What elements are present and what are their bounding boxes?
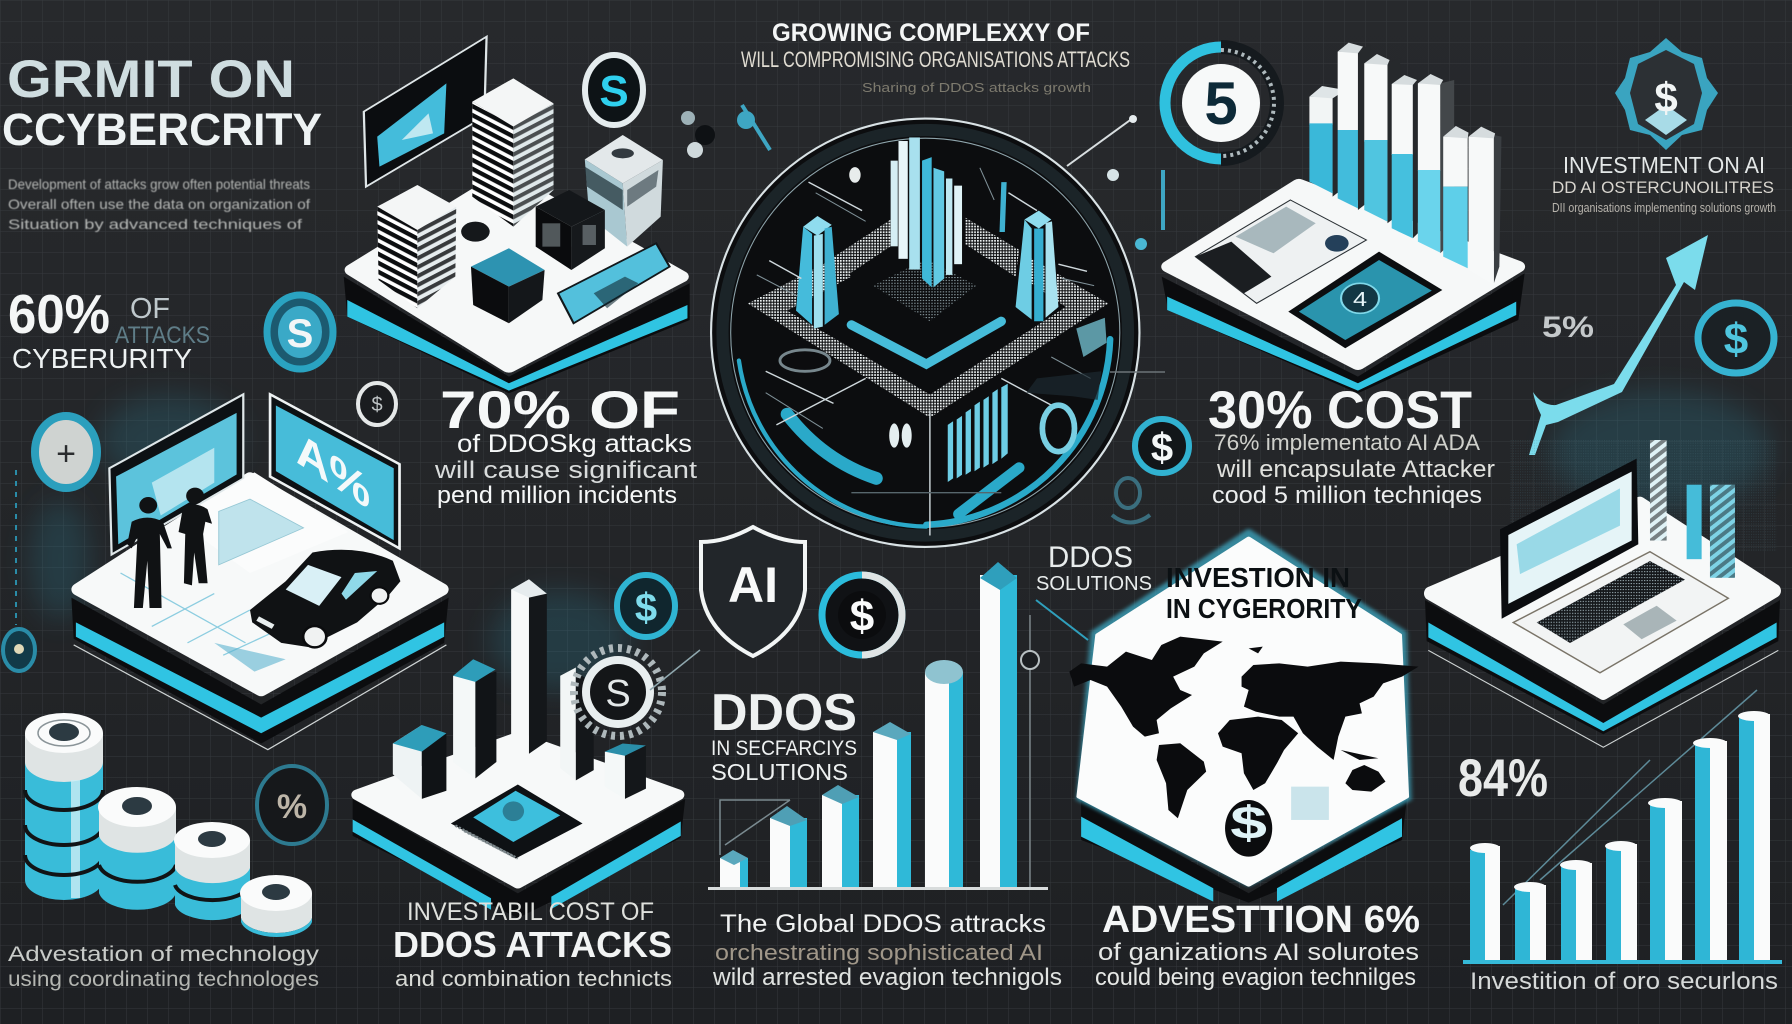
- icon: dollar coin right: $: [1724, 315, 1748, 364]
- text block: investment on AI: DD AI OSTERCUNOILITRES: [1552, 178, 1774, 197]
- text block: intro paragraph: Development of attacks grow often potential threats: [8, 176, 310, 192]
- icon: stack one: [25, 713, 103, 900]
- panel: laptop platform: [1425, 440, 1780, 747]
- chart: rising bars with drops: [708, 562, 1048, 890]
- text block: investable cost of DDoS attacks: [393, 898, 672, 991]
- text block: DDoS in security solutions: DDOS: [711, 684, 857, 742]
- bar five: [1648, 798, 1682, 960]
- icon: face coin left: +: [56, 435, 76, 473]
- chart: lower stripes: [948, 384, 1008, 482]
- stat: 30% cost: [1208, 381, 1495, 509]
- heading: growth on cybersecurity: GRMIT ON: [7, 50, 295, 109]
- connector: solutions pointer: [1036, 600, 1088, 640]
- icon: laptop base and keyboard: [176, 472, 348, 573]
- connectors: circuit lines: [757, 168, 1094, 536]
- icon: face coin left: [35, 416, 97, 488]
- stat: 60% of cybersecurity: CYBERURITY: [12, 343, 192, 374]
- bar three: [822, 785, 859, 887]
- icon: dollar gauge: $: [850, 592, 874, 641]
- stat: adoption 6%: ADVESTTION 6%: [1102, 899, 1420, 941]
- stat: 5%: 5%: [1542, 311, 1594, 344]
- icon: small emblem: $: [371, 394, 383, 416]
- icon: tall server tower: [472, 78, 554, 227]
- connector: shield line: [650, 650, 700, 690]
- text block: investment caption: Investition of oro securlons: [1470, 968, 1778, 995]
- stat: 84%: 84%: [1458, 749, 1548, 808]
- icon: S coin top: [585, 55, 643, 125]
- stat: adoption 6%: of ganizations AI solurotes: [1098, 939, 1419, 966]
- stat: 70% of DDoS attacks: of DDOSkg attacks: [457, 430, 692, 458]
- stat: 30% cost: will encapsulate Attacker: [1216, 456, 1495, 483]
- icon: dollar coin right: [1698, 303, 1774, 373]
- detail: dotted backdrop: [1510, 440, 1777, 552]
- panel: laptop people and car platform: [71, 394, 449, 750]
- icon: cube with cyan top: [471, 248, 545, 323]
- icon: black oval: [461, 222, 490, 242]
- icon: gear S coin: [574, 648, 662, 736]
- chart: 3D bars: [393, 579, 646, 799]
- icon: server tower left: [377, 185, 456, 308]
- stat: 60% of cybersecurity: ATTACKS: [115, 322, 210, 349]
- stat: 30% cost: 76% implementato AI ADA: [1214, 430, 1480, 455]
- icon: person two: [179, 488, 212, 585]
- detail: small fittings: [780, 167, 1107, 452]
- icon: right screen: [270, 394, 400, 548]
- text block: investable cost of DDoS attacks: INVESTABIL COST OF: [407, 898, 654, 926]
- bar four: [873, 722, 911, 887]
- text block: DDoS solutions small: SOLUTIONS: [1036, 573, 1152, 595]
- icon: S coin left: S: [287, 312, 313, 356]
- icon: dollar coin centre-right: $: [1151, 426, 1173, 470]
- icon: dollar drop: [1225, 797, 1272, 857]
- chart: investment bars: [1463, 690, 1782, 964]
- stat: 30% cost: cood 5 million techniqes: [1212, 482, 1482, 509]
- text block: DDoS in security solutions: [711, 684, 857, 785]
- text block: adoption caption: using coordinating technologes: [8, 968, 319, 991]
- stat: 30% cost: 30% COST: [1208, 381, 1472, 440]
- icon: tablet: [1288, 252, 1442, 348]
- icon: gear S coin: S: [605, 673, 631, 715]
- icon: S coin left: [267, 295, 333, 369]
- icon: percent coin: [257, 766, 327, 844]
- stat: 70% of DDoS attacks: pend million incidents: [437, 482, 677, 509]
- bar seven: [1738, 711, 1770, 960]
- icon: small pin left: [3, 470, 35, 671]
- arrow: growth trend: [1529, 235, 1708, 455]
- icon: cyan card: [558, 243, 670, 323]
- panel: world investment hexagon: [1069, 528, 1419, 903]
- text block: investment on AI: [1552, 152, 1776, 215]
- icon: dollar drop: $: [1230, 797, 1267, 849]
- icon: small emblem: [358, 383, 396, 425]
- icon: laptop: [1500, 459, 1728, 673]
- chart: right tower: [1016, 211, 1058, 321]
- text block: DDoS in security solutions: SOLUTIONS: [711, 759, 848, 785]
- panel: coin stacks: [25, 713, 312, 937]
- icon: AI shield: [701, 527, 805, 656]
- icon: S coin top: S: [599, 67, 629, 116]
- text block: global DDoS attacks: [712, 910, 1062, 991]
- icon: AI shield: AI: [728, 557, 778, 613]
- chart: central bars: [891, 137, 962, 287]
- text block: investment on AI: INVESTMENT ON AI: [1563, 152, 1765, 178]
- heading: growth on cybersecurity: [2, 50, 322, 155]
- icon: person one: [127, 497, 172, 608]
- text block: investable cost of DDoS attacks: DDOS ATTACKS: [393, 924, 672, 965]
- stat: adoption 6%: could being evagion technilges: [1095, 964, 1416, 991]
- text block: global DDoS attacks: The Global DDOS attracks: [720, 910, 1046, 938]
- icon: tablet: [451, 785, 583, 858]
- text block: global DDoS attacks: wild arrested evagion technigols: [712, 964, 1062, 991]
- bar four: [1605, 841, 1637, 960]
- panel: server platform: [344, 37, 690, 393]
- icon: badge with 5: [1165, 47, 1277, 159]
- stat: 70% of DDoS attacks: will cause significant: [434, 457, 697, 484]
- connector: trend line and marker: [720, 800, 790, 855]
- icon: black cube: [536, 190, 605, 270]
- icon: black car: [250, 550, 400, 647]
- icon: percent coin: %: [277, 788, 307, 826]
- icon: investment shield badge: [1615, 38, 1718, 150]
- icon: light box: [585, 135, 663, 247]
- text block: intro paragraph: Situation by advanced techniques of: [8, 216, 302, 232]
- bar one: [720, 850, 748, 887]
- swoosh: cyan ring accents: [739, 321, 1110, 527]
- icon: stack four: [240, 875, 312, 937]
- detail: blue scribble: [214, 643, 286, 672]
- heading: investment in cybersecurity: [1166, 562, 1362, 624]
- icon: tablet: 4: [1353, 288, 1367, 310]
- map: continents: [1069, 637, 1419, 818]
- detail: white hex face: [1079, 538, 1407, 885]
- bar three: [1560, 860, 1592, 960]
- bar two: [770, 806, 807, 887]
- heading: growing complexity of attacks: GROWING COMPLEXXY OF: [772, 19, 1090, 47]
- bar six: [980, 562, 1017, 887]
- heading: investment in cybersecurity: IN CYGERORITY: [1166, 593, 1362, 624]
- bar six: [1693, 738, 1727, 960]
- icon: stripe towers: [1650, 440, 1735, 578]
- heading: growing complexity of attacks: Sharing of DDOS attacks growth: [862, 80, 1091, 95]
- heading: growing complexity of attacks: WILL COMPROMISING ORGANISATIONS ATTACKS: [741, 47, 1130, 72]
- bar five: [925, 660, 963, 887]
- icon: left screen: [109, 394, 243, 555]
- icon: dollar gauge: [822, 575, 902, 655]
- icon: wall monitor: [364, 37, 487, 187]
- text block: intro paragraph: Overall often use the data on organization of: [8, 196, 310, 212]
- icon: dollar coin mid: $: [635, 586, 657, 630]
- icon: dollar coin mid: [617, 575, 675, 637]
- text block: DDoS solutions small: DDOS: [1048, 541, 1133, 574]
- icon: microphone emblem: [1112, 478, 1150, 522]
- icon: dollar coin centre-right: [1135, 419, 1189, 473]
- icon: badge with 5: 5: [1204, 70, 1238, 137]
- icon: stack three: [174, 822, 250, 920]
- label: A% on screen: A%: [296, 420, 370, 520]
- mesh: dotted diamond: [748, 218, 1108, 418]
- stat: 70% of DDoS attacks: [434, 381, 697, 509]
- text block: DDoS in security solutions: IN SECFARCIYS: [711, 737, 857, 760]
- icon: stack two: [98, 787, 176, 910]
- panel: central circuit globe: [711, 119, 1139, 547]
- panel: cost platform with bars: [1162, 43, 1525, 393]
- text block: investable cost of DDoS attacks: and combination technicts: [395, 966, 672, 991]
- bar two: [1514, 882, 1546, 960]
- text block: adoption caption: Advestation of mechnology: [8, 943, 320, 966]
- text block: DDoS solutions small: [1036, 541, 1152, 595]
- chart: left tower: [796, 216, 839, 328]
- bar one: [1470, 843, 1500, 960]
- icon: investment shield badge: $: [1654, 74, 1678, 121]
- chart: 3D bars: [1309, 43, 1501, 285]
- stat: 60% of cybersecurity: OF: [130, 293, 170, 325]
- panel: attack cost platform: [353, 579, 685, 918]
- icon: faint city: [1291, 787, 1329, 820]
- stat: adoption 6%: [1095, 899, 1420, 991]
- heading: investment in cybersecurity: INVESTION IN: [1166, 562, 1350, 593]
- text block: intro paragraph: [8, 176, 310, 232]
- stat: 60% of cybersecurity: 60%: [8, 283, 110, 345]
- text block: global DDoS attacks: orchestrating sophisticated AI: [715, 940, 1043, 965]
- icon: floor grid: [121, 573, 286, 655]
- stat: 60% of cybersecurity: [8, 283, 210, 374]
- detail: hex glow: [1076, 528, 1411, 887]
- heading: growing complexity of attacks: [741, 19, 1130, 95]
- icon: document photo: [1195, 200, 1366, 303]
- connector: pointer and scatter around globe: [681, 105, 1165, 372]
- text block: adoption caption: [8, 943, 320, 991]
- stat: 70% of DDoS attacks: 70% OF: [440, 381, 680, 440]
- heading: growth on cybersecurity: CCYBERCRITY: [2, 104, 322, 155]
